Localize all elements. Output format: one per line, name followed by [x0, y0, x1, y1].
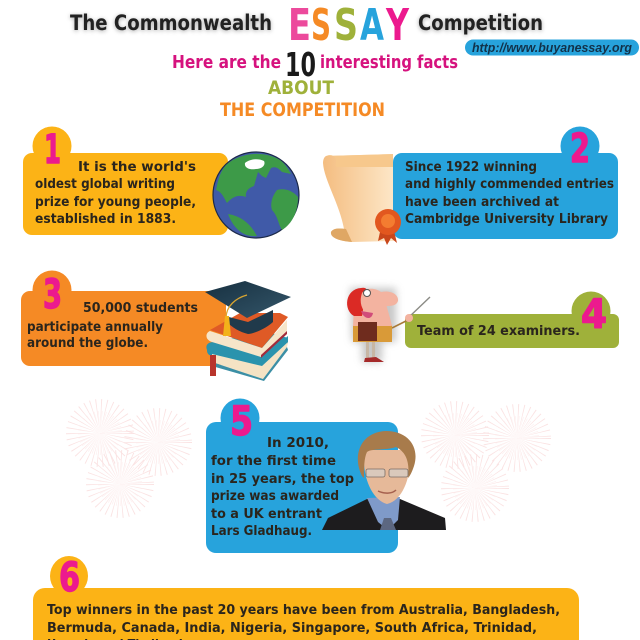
ESSAY wordmark [288, 0, 410, 51]
fact 2 text: Cambridge University Library [405, 211, 608, 227]
subtitle: ABOUT [268, 77, 334, 99]
ESSAY wordmark: S [334, 0, 358, 51]
number 1: 1 [44, 127, 61, 173]
fact 6 text [47, 602, 560, 640]
panel: fact 6 [33, 555, 579, 640]
panel: fact 5 [206, 398, 398, 553]
book [358, 322, 377, 341]
number 2: 2 [570, 126, 590, 172]
website link pill: http://www.buyanessay.org [472, 41, 632, 55]
lower book [212, 330, 288, 362]
fact 6 text: Top winners in the past 20 years have been from Australia, Bangladesh, [47, 602, 560, 618]
number 5: 5 [230, 399, 253, 445]
icon: rosette [375, 209, 401, 245]
fact 3 text: 50,000 students [83, 300, 198, 316]
fact 5 text: for the first time [211, 453, 336, 469]
tassel [223, 316, 231, 336]
subtitle: Here are the [172, 52, 281, 73]
icon: teacher with pointer [347, 288, 430, 362]
fact 1 text [35, 159, 196, 227]
number 6: 6 [59, 555, 80, 601]
subtitle: interesting facts [320, 52, 458, 73]
upper book [210, 313, 288, 348]
icon: scroll [323, 154, 394, 242]
fact 2 text: have been archived at [405, 194, 559, 210]
fact 2 text: and highly commended entries [405, 176, 614, 192]
subtitle [172, 45, 458, 121]
title: Competition [418, 11, 543, 35]
pointer [408, 297, 430, 318]
fact 5 text: prize was awarded [211, 488, 339, 504]
fact 3 text [27, 300, 198, 351]
icon: globe [213, 152, 299, 238]
fireworks right [438, 418, 534, 505]
number 3: 3 [43, 272, 62, 318]
mortarboard [225, 310, 273, 334]
fact 3 text: participate annually [27, 319, 163, 335]
panel: fact 4 [405, 292, 619, 348]
panel: fact 2 [393, 126, 618, 239]
icon: graduation cap on books [205, 281, 291, 381]
panel: fact 1 [23, 126, 228, 235]
subtitle: THE COMPETITION [220, 99, 385, 121]
fact 5 text: In 2010, [267, 435, 329, 451]
ESSAY wordmark: Y [385, 0, 410, 51]
ESSAY wordmark: S [311, 0, 331, 51]
fact 1 text: established in 1883. [35, 211, 176, 227]
face [361, 289, 398, 313]
ESSAY wordmark: E [288, 0, 311, 51]
fact 4 text: Team of 24 examiners. [417, 323, 580, 339]
ESSAY wordmark: A [360, 0, 384, 51]
fact 1 text: prize for young people, [35, 194, 196, 210]
fact 5 text: in 25 years, the top [211, 471, 354, 487]
fireworks left [83, 416, 175, 501]
fact 2 text [405, 159, 614, 227]
title: The Commonwealth [70, 11, 272, 35]
panel: fact 3 [21, 270, 226, 366]
fact 2 text: Since 1922 winning [405, 159, 537, 175]
photo: Lars Gladhaug [322, 431, 446, 530]
number 4: 4 [581, 292, 607, 338]
fact 1 text: oldest global writing [35, 176, 175, 192]
fact 5 text: Lars Gladhaug. [211, 523, 312, 539]
torso [353, 304, 392, 326]
fact 6 text: Bermuda, Canada, India, Nigeria, Singapore, South Africa, Trinidad, [47, 620, 537, 636]
fact 5 text [211, 435, 354, 539]
subtitle: 10 [285, 45, 316, 84]
fact 3 text: around the globe. [27, 335, 148, 351]
skirt [353, 325, 392, 342]
hair [347, 288, 367, 316]
title [70, 0, 543, 51]
fact 1 text: It is the world's [78, 159, 196, 175]
legs [366, 341, 369, 359]
fact 5 text: to a UK entrant [211, 506, 323, 522]
hand [405, 314, 413, 322]
